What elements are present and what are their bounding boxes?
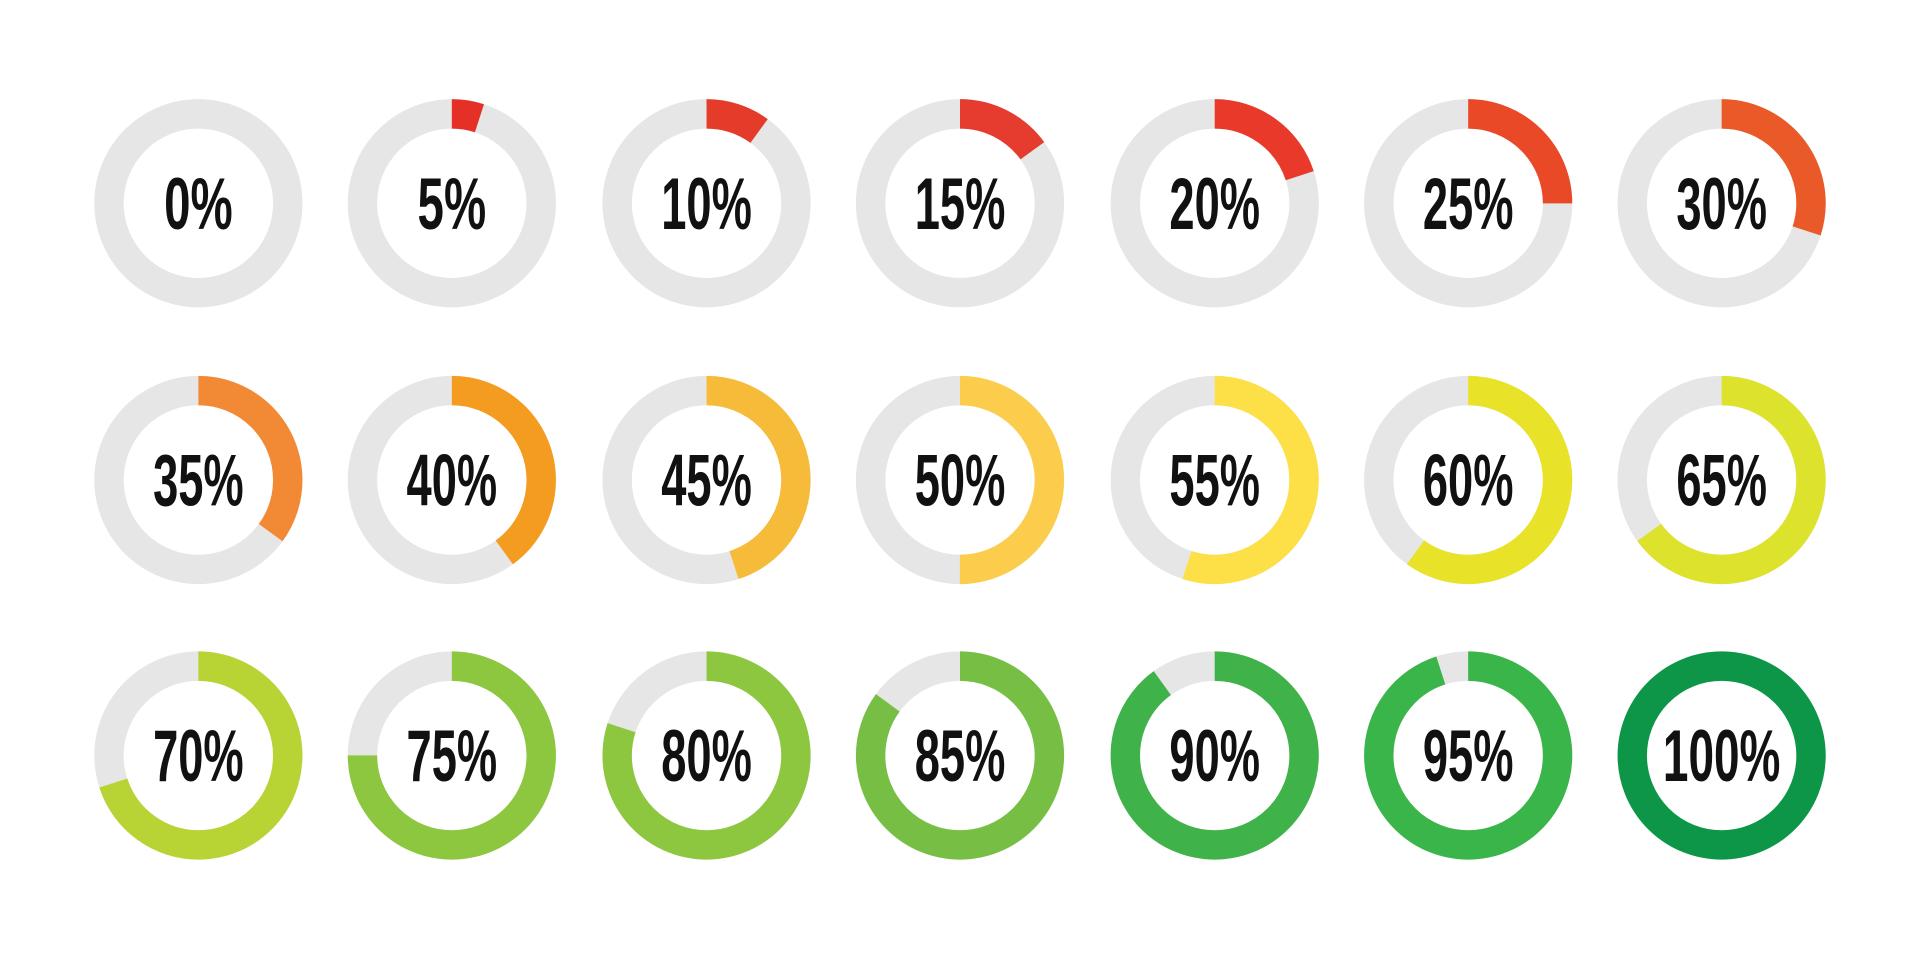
donut 5%: 5% — [418, 162, 486, 245]
donut 20%: 20% — [1169, 162, 1260, 245]
donut 60%: 60% — [1423, 439, 1513, 522]
donut 30% — [1632, 114, 1811, 293]
donut 5% — [362, 114, 541, 293]
donut 75%: 75% — [407, 714, 497, 797]
donut 30%: 30% — [1676, 162, 1767, 245]
donut 40%: 40% — [407, 439, 497, 522]
donut 80%: 80% — [661, 714, 752, 797]
donut 90%: 90% — [1169, 714, 1260, 797]
donut 80% — [617, 666, 796, 845]
donut 25%: 25% — [1423, 162, 1513, 245]
donut 0% — [109, 114, 288, 293]
donut 100%: 100% — [1663, 714, 1780, 797]
donut 10%: 10% — [661, 162, 752, 245]
donut 90% — [1125, 666, 1304, 845]
donut 15%: 15% — [915, 162, 1005, 245]
donut 10% — [617, 114, 796, 293]
donut 20% — [1125, 114, 1304, 293]
donut 95% — [1379, 666, 1558, 845]
donut 60% — [1379, 391, 1558, 569]
donut 100% — [1632, 666, 1811, 845]
donut 35%: 35% — [153, 439, 244, 522]
donut 50%: 50% — [915, 439, 1005, 522]
donut 85% — [871, 666, 1049, 845]
donut 55%: 55% — [1169, 439, 1260, 522]
donut grid — [109, 114, 1811, 845]
donut 15% — [871, 114, 1049, 293]
donut 35% — [109, 391, 288, 569]
donut 70%: 70% — [153, 714, 244, 797]
donut 95%: 95% — [1423, 714, 1513, 797]
donut 70% — [109, 666, 288, 845]
donut 65% — [1632, 391, 1811, 569]
donut 55% — [1125, 391, 1304, 569]
donut 25% — [1379, 114, 1558, 293]
donut 75% — [362, 666, 541, 845]
donut 40% — [362, 391, 541, 569]
donut 45%: 45% — [661, 439, 752, 522]
donut 45% — [617, 391, 796, 569]
donut 0%: 0% — [164, 162, 233, 245]
donut 50% — [871, 391, 1049, 569]
donut 65%: 65% — [1676, 439, 1767, 522]
donut 85%: 85% — [915, 714, 1005, 797]
